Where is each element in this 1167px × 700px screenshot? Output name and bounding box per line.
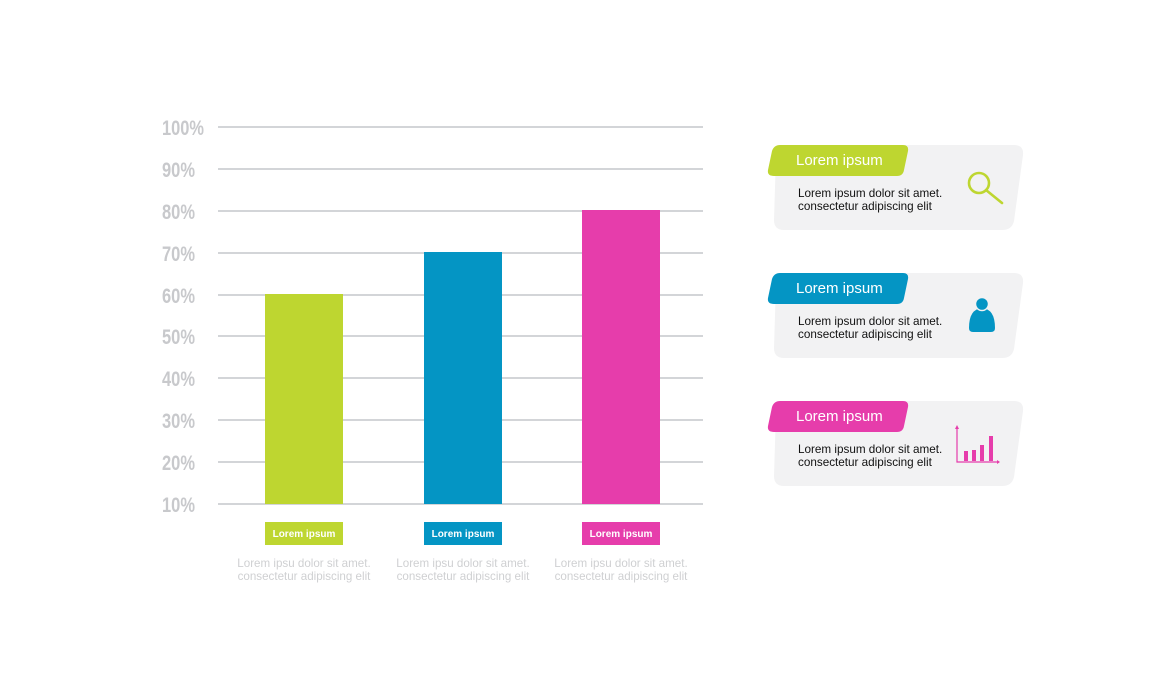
panel: card 1 xyxy=(768,145,1023,230)
panel: card 2: Lorem ipsum dolor sit amet. xyxy=(798,315,942,328)
panel: card 2: consectetur adipiscing elit xyxy=(798,328,933,341)
bar label: green: consectetur adipiscing elit xyxy=(238,570,371,583)
panel: card 3: Lorem ipsum dolor sit amet. xyxy=(798,443,942,456)
y axis labels: 60% xyxy=(162,285,195,308)
y axis labels: 70% xyxy=(162,243,195,266)
y axis labels: 20% xyxy=(162,452,195,475)
tab heading: Lorem ipsum xyxy=(796,152,883,169)
bar: blue 70% xyxy=(424,252,502,504)
y axis labels: 90% xyxy=(162,159,195,182)
y axis labels: 10% xyxy=(162,494,195,517)
bar label: green: Lorem ipsu dolor sit amet. xyxy=(237,557,371,570)
panel: card 3 xyxy=(768,401,1023,486)
bar label: blue xyxy=(396,522,530,583)
chart: bar chart xyxy=(162,117,703,517)
tab heading xyxy=(768,273,908,304)
bar label: green: Lorem ipsum xyxy=(273,529,335,540)
tab heading xyxy=(768,145,908,176)
bar label: blue: Lorem ipsu dolor sit amet. xyxy=(396,557,530,570)
bar label: pink: Lorem ipsu dolor sit amet. xyxy=(554,557,688,570)
icon: person xyxy=(969,298,995,332)
bar label: pink xyxy=(554,522,688,583)
tab heading xyxy=(768,401,908,432)
bar: green 60% xyxy=(265,294,343,504)
panel: card 1: consectetur adipiscing elit xyxy=(798,200,933,213)
tab heading: Lorem ipsum xyxy=(796,280,883,297)
y axis labels: 100% xyxy=(162,117,204,140)
panel: card 1: Lorem ipsum dolor sit amet. xyxy=(798,187,942,200)
icon: magnifier xyxy=(969,173,1002,203)
bar label: blue: Lorem ipsum xyxy=(432,529,494,540)
y axis labels: 50% xyxy=(162,326,195,349)
y axis labels: 30% xyxy=(162,410,195,433)
y axis labels: 40% xyxy=(162,368,195,391)
bar label: pink: consectetur adipiscing elit xyxy=(555,570,688,583)
bar label: blue: consectetur adipiscing elit xyxy=(397,570,530,583)
bar label: green xyxy=(237,522,371,583)
y axis labels: 80% xyxy=(162,201,195,224)
tab heading: Lorem ipsum xyxy=(796,408,883,425)
bar label: pink: Lorem ipsum xyxy=(590,529,652,540)
bar: pink 80% xyxy=(582,210,660,504)
panel: card 3: consectetur adipiscing elit xyxy=(798,456,933,469)
icon: bar chart xyxy=(955,425,1000,464)
panel: card 2 xyxy=(768,273,1023,358)
y axis labels xyxy=(162,117,204,517)
